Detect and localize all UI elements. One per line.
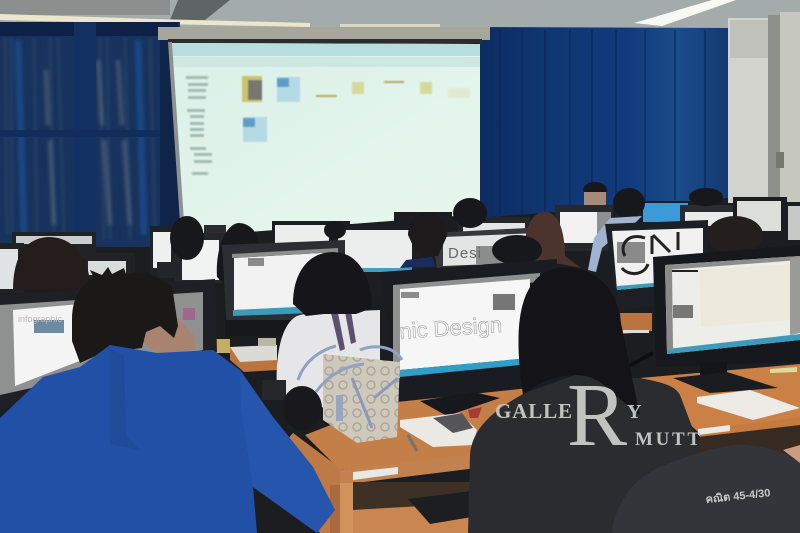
person: blue shirts back row xyxy=(400,216,642,272)
monitor stand right xyxy=(700,362,727,380)
wall: right side xyxy=(728,12,800,205)
monitor: center Dell xyxy=(381,259,557,416)
screen: file icons xyxy=(242,76,470,142)
projector screen xyxy=(158,27,490,238)
desk: main wood desks xyxy=(260,364,800,533)
text: back monitor Design: Desi xyxy=(448,245,482,262)
ceiling with lights xyxy=(0,0,800,30)
monitor stand xyxy=(420,392,500,416)
watermark: Gallery RMUTT: GALLE xyxy=(495,399,572,423)
pen tablet stylus xyxy=(625,353,653,368)
handbag xyxy=(282,346,402,443)
person: woman in black jacket xyxy=(468,267,702,533)
watermark: Gallery RMUTT xyxy=(495,366,700,465)
curtain: left xyxy=(0,22,180,247)
monitor: front left xyxy=(0,279,217,410)
text: infographic on monitor: infographic xyxy=(18,314,63,324)
curtain: right xyxy=(478,27,728,218)
back row monitors xyxy=(0,197,800,296)
items on desk: notebook and phone xyxy=(400,390,800,451)
person: woman with white jacket xyxy=(262,252,380,410)
screen: sidebar xyxy=(186,76,212,175)
watermark: Gallery RMUTT: MUTT xyxy=(635,429,700,450)
person: man in blue shirt xyxy=(0,267,335,533)
monitor: mid-right with curve xyxy=(605,220,708,310)
chair label: คณิต 45-4/30 xyxy=(705,486,771,506)
keyboard xyxy=(408,491,472,524)
desk: back wood strips xyxy=(216,313,652,372)
chair back xyxy=(612,445,800,533)
watermark: Gallery RMUTT: R xyxy=(567,366,627,465)
monitor: right Dell xyxy=(653,245,800,393)
people: back row xyxy=(13,182,763,290)
watermark: Gallery RMUTT: Y xyxy=(627,401,642,423)
text: screen graphic design: nic Design xyxy=(399,312,503,344)
monitor: mid-left xyxy=(222,240,345,336)
